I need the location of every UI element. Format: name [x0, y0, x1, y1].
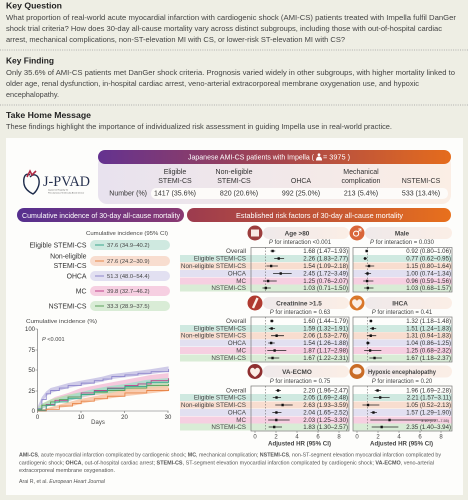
x axis: forest left: 8 — [337, 434, 341, 440]
x axis: forest left: 0 — [253, 434, 257, 440]
forest panel: VA-ECMO: 2.63 (1.93–3.59) — [303, 402, 348, 409]
forest panel: hypoxic encephalopathy: 1.05 (0.52–2.13) — [406, 402, 451, 409]
forest panel: IHCA: 1.67 (1.18–2.37) — [406, 355, 451, 362]
key question text: arrest, mechanical complications, non-ST-elevation MI with CS, or lower-risk ST-elevation MI with CS? — [6, 35, 345, 44]
forest panel: creatinine: 1.54 (1.26–1.88) — [303, 340, 348, 347]
legend: non-eligible STEMI-CS: 27.6 (24.2–30.9) — [107, 259, 150, 265]
footnote abbreviations: extracorporeal membrane oxygenation. — [19, 468, 115, 474]
x axis: forest right: 2 — [376, 434, 380, 440]
legend: OHCA: OHCA — [67, 274, 87, 280]
forest panel: hypoxic encephalopathy: Hypoxic encephalopathy — [368, 369, 436, 376]
key finding text — [6, 68, 455, 99]
logo: J-PVAD: Percutaneous Ventricular Assist Device — [48, 192, 85, 194]
table column headers — [158, 169, 441, 185]
forest panel: age over 80: 2.45 (1.72–3.49) — [303, 270, 348, 278]
forest panel: IHCA — [350, 296, 452, 362]
forest panel: male: 0.92 (0.80–1.06) — [406, 248, 451, 255]
key question text — [6, 13, 457, 44]
table column headers: OHCA — [291, 178, 311, 185]
row colour bands and row labels: OHCA — [228, 270, 247, 278]
forest panel: IHCA: 1.32 (1.18–1.48) — [406, 318, 451, 325]
cumulative incidence legend — [29, 231, 170, 311]
row colour bands and row labels: Non-eligible STEMI-CS — [181, 402, 246, 409]
table number row: 213 (5.4%) — [344, 190, 378, 198]
cumulative incidence chart: 0 — [32, 409, 36, 415]
forest panel: male — [350, 226, 452, 292]
take home heading: Take Home Message — [6, 111, 92, 120]
patient table — [98, 150, 451, 204]
row colour bands and row labels: Overall — [226, 248, 246, 255]
forest panel: hypoxic encephalopathy: 1.96 (1.69–2.28) — [406, 388, 451, 394]
cumulative incidence chart — [25, 319, 172, 426]
key question text: shock trial criteria? How does 30-day all-cause mortality vary across distinct subgroups, including those with out-of-hospital cardiac — [6, 24, 442, 33]
table title banner — [98, 150, 451, 164]
forest panel: VA-ECMO: 1.83 (1.30–2.57) — [303, 424, 348, 431]
x axis: forest right: 4 — [397, 434, 401, 440]
forest panel: VA-ECMO: 2.05 (1.69–2.48) — [303, 394, 348, 402]
forest panel: creatinine — [248, 296, 349, 362]
icon: heart monitor — [248, 364, 262, 379]
table column headers: Eligible — [164, 169, 186, 176]
table number row: Number (%) — [109, 190, 147, 198]
x axis: forest right: 0 — [355, 434, 359, 440]
row colour bands and row labels: Eligible STEMI-CS — [194, 394, 246, 402]
x axis: forest left: Adjusted HR (95% CI) — [268, 440, 331, 448]
key finding text: older age, renal dysfunction, in-hospital cardiac arrest, veno-arterial extracorporeal membrane oxygenation use, and hypoxic — [6, 79, 419, 88]
forest panel: age over 80: Age >80 — [285, 230, 310, 238]
x axis: forest left: 4 — [295, 434, 299, 440]
forest panel: VA-ECMO — [248, 364, 349, 448]
row colour bands and row labels: MC — [236, 348, 246, 354]
table column headers: Non-eligible — [216, 169, 253, 176]
forest panel: hypoxic encephalopathy: 2.21 (1.57–3.11) — [407, 394, 451, 402]
legend: non-eligible STEMI-CS: STEMI-CS — [54, 263, 87, 270]
forest panel: male: 0.77 (0.62–0.95) — [406, 256, 451, 262]
forest panel: creatinine: 2.06 (1.53–2.76) — [303, 333, 348, 340]
cumulative incidence chart: 0 — [36, 415, 40, 421]
forest panel: VA-ECMO: P for interaction = 0.75 — [270, 379, 331, 385]
legend: OHCA: 51.3 (48.0–54.4) — [107, 274, 150, 280]
table number row — [109, 188, 448, 199]
row colour bands and row labels: Eligible STEMI-CS — [194, 326, 246, 332]
legend: NSTEMI-CS: 33.3 (28.9–37.5) — [107, 304, 150, 310]
key finding text: Only 35.6% of AMI-CS patients met DanGer shock criteria. Prognosis varied widely in other subgroups, with higher mortality linked to — [6, 68, 455, 77]
icon: calendar — [248, 226, 262, 240]
icon: test tube — [248, 296, 262, 310]
x axis: forest left: 2 — [274, 434, 278, 440]
row colour bands and row labels: Overall — [226, 388, 246, 394]
row colour bands and row labels: Overall — [226, 318, 246, 325]
cumulative incidence chart: P <0.001 — [42, 337, 65, 343]
cumulative incidence chart: 30 — [165, 415, 172, 421]
logo: J-PVAD: J-PVAD — [43, 174, 90, 190]
table title banner: Japanese AMI-CS patients with Impella ( — [188, 152, 315, 162]
x axis: forest right — [355, 431, 443, 448]
forest panel: creatinine: 1.67 (1.22–2.31) — [303, 355, 348, 362]
forest panel: hypoxic encephalopathy: 2.35 (1.40–3.94) — [406, 424, 451, 431]
cumulative incidence chart: 75 — [28, 348, 36, 354]
row colour bands and row labels: Non-eligible STEMI-CS — [181, 263, 246, 270]
section banner: cumulative incidence: Cumulative incidence of 30-day all-cause mortality — [22, 211, 180, 220]
forest panel: creatinine: 1.60 (1.44–1.79) — [303, 318, 348, 325]
table column headers: complication — [342, 178, 381, 185]
legend: MC — [76, 286, 170, 296]
legend: non-eligible STEMI-CS — [50, 254, 170, 270]
forest panel: age over 80: 1.68 (1.47–1.93) — [303, 248, 348, 255]
row colour bands and row labels: OHCA — [228, 410, 247, 416]
take home message section — [6, 111, 392, 131]
forest panel: IHCA: 1.31 (0.94–1.83) — [406, 333, 451, 340]
legend: MC: MC — [76, 288, 87, 296]
icon: brain — [350, 364, 364, 379]
forest panel: IHCA: 1.04 (0.86–1.25) — [406, 340, 451, 347]
cumulative incidence chart: 10 — [78, 415, 85, 421]
forest panel: male: 0.96 (0.59–1.56) — [406, 278, 451, 285]
forest panel: age over 80: 1.25 (0.76–2.07) — [303, 278, 348, 285]
row colour bands and row labels — [180, 248, 452, 431]
key finding section — [6, 56, 455, 99]
forest panel: hypoxic encephalopathy: 3.10 (1.27–7.55) — [421, 419, 450, 423]
row colour bands and row labels: OHCA — [228, 340, 247, 347]
logo: J-PVAD: Japanese Registry for — [48, 188, 69, 192]
forest panel: male: P for interaction = 0.030 — [370, 240, 435, 246]
cumulative incidence chart: 100 — [25, 327, 36, 333]
forest panel: VA-ECMO: 2.03 (1.25–3.30) — [303, 417, 348, 424]
forest panel: age over 80: 2.26 (1.83–2.77) — [303, 256, 348, 262]
footnote abbreviations — [19, 452, 441, 474]
table number row: 820 (20.6%) — [220, 190, 258, 198]
forest panel: IHCA: IHCA — [392, 300, 408, 308]
survival curves — [38, 366, 169, 411]
logo: J-PVAD — [24, 171, 90, 194]
table column headers: NSTEMI-CS — [402, 178, 441, 185]
row colour bands and row labels: NSTEMI-CS — [211, 424, 246, 431]
forest panel: creatinine: 1.59 (1.32–1.91) — [303, 326, 348, 332]
legend: eligible STEMI-CS: Eligible STEMI-CS — [29, 242, 87, 250]
forest panel: male: 1.00 (0.74–1.34) — [406, 270, 451, 278]
forest panel: male: 1.15 (0.80–1.64) — [406, 263, 451, 270]
x axis: forest right: 8 — [439, 434, 443, 440]
take home text: These findings highlight the importance of individualized risk assessment in guiding Impella use in real-world practice. — [6, 122, 392, 131]
forest panel: age over 80 — [248, 226, 349, 292]
forest panel: VA-ECMO: VA-ECMO — [282, 369, 312, 376]
x axis: forest left — [253, 431, 341, 448]
key finding text: encephalopathy. — [6, 90, 59, 99]
chart axes — [36, 329, 168, 413]
forest panel: VA-ECMO: 2.20 (1.96–2.47) — [303, 388, 348, 394]
legend: eligible STEMI-CS: 37.6 (34.9–40.2) — [107, 243, 150, 249]
cumulative incidence chart: 50 — [28, 368, 36, 374]
forest panel: IHCA: 1.51 (1.24–1.83) — [406, 326, 451, 332]
row colour bands and row labels: MC — [236, 278, 246, 285]
forest panel: VA-ECMO: 2.04 (1.65–2.52) — [303, 410, 348, 416]
section banner: risk factors: Established risk factors of 30-day all-cause mortality — [236, 211, 403, 220]
x axis: forest right: 6 — [418, 434, 422, 440]
cumulative incidence chart: Days — [91, 420, 105, 426]
section banner: risk factors — [187, 208, 451, 222]
forest panel: IHCA: P for interaction = 0.41 — [372, 310, 433, 316]
forest panel: creatinine: Creatinine >1.5 — [276, 300, 322, 308]
row colour bands and row labels: Non-eligible STEMI-CS — [181, 333, 246, 340]
forest panel: hypoxic encephalopathy: P for interaction = 0.20 — [372, 379, 433, 385]
forest panel: hypoxic encephalopathy: 1.57 (1.29–1.90) — [406, 410, 451, 416]
forest panel: age over 80: 1.54 (1.09–2.18) — [303, 263, 348, 270]
cumulative incidence chart: 25 — [28, 389, 36, 395]
cumulative incidence legend: Cumulative incidence (95% CI) — [86, 231, 168, 237]
table number row: 533 (13.4%) — [402, 190, 440, 198]
table number row: 1417 (35.6%) — [154, 190, 196, 198]
x axis: forest left: 6 — [316, 434, 320, 440]
citation: Arai R, et al. European Heart Journal — [19, 479, 106, 485]
table column headers: STEMI-CS — [217, 178, 251, 185]
forest panel: male: Male — [395, 230, 410, 238]
cumulative incidence chart: Cumulative incidence (%) — [26, 319, 97, 325]
legend: NSTEMI-CS — [49, 301, 170, 311]
key question text: What proportion of real-world acute myocardial infarction with cardiogenic shock (AMI-CS) patients treated with Impella fulfil DanGer — [6, 13, 457, 22]
forest panel: creatinine: P for interaction = 0.63 — [270, 310, 331, 316]
row colour bands and row labels: Eligible STEMI-CS — [194, 256, 246, 262]
table column headers: STEMI-CS — [158, 178, 192, 185]
table column headers: Mechanical — [343, 169, 379, 176]
x axis: forest right: Adjusted HR (95% CI) — [370, 440, 433, 448]
footnote abbreviations: cardiogenic shock; OHCA, out-of-hospital cardiac arrest; STEMI-CS, ST-segment elevation myocardial infarction complicated by cardiogenic shock; VA-ECMO, veno-arterial — [19, 460, 434, 466]
forest panel: IHCA: 1.25 (0.68–2.32) — [406, 348, 451, 354]
row colour bands and row labels: MC — [236, 417, 246, 424]
icon: heart — [350, 296, 364, 310]
cumulative incidence chart: 20 — [121, 415, 128, 421]
legend: NSTEMI-CS: NSTEMI-CS — [49, 304, 87, 310]
table title banner: = 3975 ) — [323, 152, 350, 162]
footnote abbreviations: AMI-CS, acute myocardial infarction complicated by cardiogenic shock; MC, mechanical complication; NSTEMI-CS, non-ST-segment elevation myocardial infarction complicated by — [19, 452, 441, 458]
forest panel: age over 80: P for interaction <0.001 — [269, 240, 332, 246]
forest panel: hypoxic encephalopathy — [350, 364, 452, 448]
section banner: cumulative incidence — [17, 208, 184, 222]
legend: OHCA — [67, 271, 170, 281]
forest panel: creatinine: 1.87 (1.17–2.98) — [303, 348, 348, 354]
white figure panel — [6, 138, 463, 495]
row colour bands and row labels: NSTEMI-CS — [211, 355, 246, 362]
key question heading: Key Question — [6, 2, 62, 10]
key question section — [6, 2, 457, 44]
table number row: 992 (25.0%) — [282, 190, 320, 198]
legend: MC: 39.8 (32.7–46.2) — [107, 289, 150, 295]
forest panel: male: 1.03 (0.68–1.57) — [406, 285, 451, 292]
key finding heading: Key Finding — [6, 56, 54, 66]
legend: eligible STEMI-CS — [29, 240, 170, 250]
icon: male symbol: ♂ — [352, 226, 362, 240]
forest panel: age over 80: 1.03 (0.71–1.50) — [303, 285, 348, 292]
row colour bands and row labels: NSTEMI-CS — [211, 285, 246, 292]
legend: non-eligible STEMI-CS: Non-eligible — [50, 254, 87, 260]
